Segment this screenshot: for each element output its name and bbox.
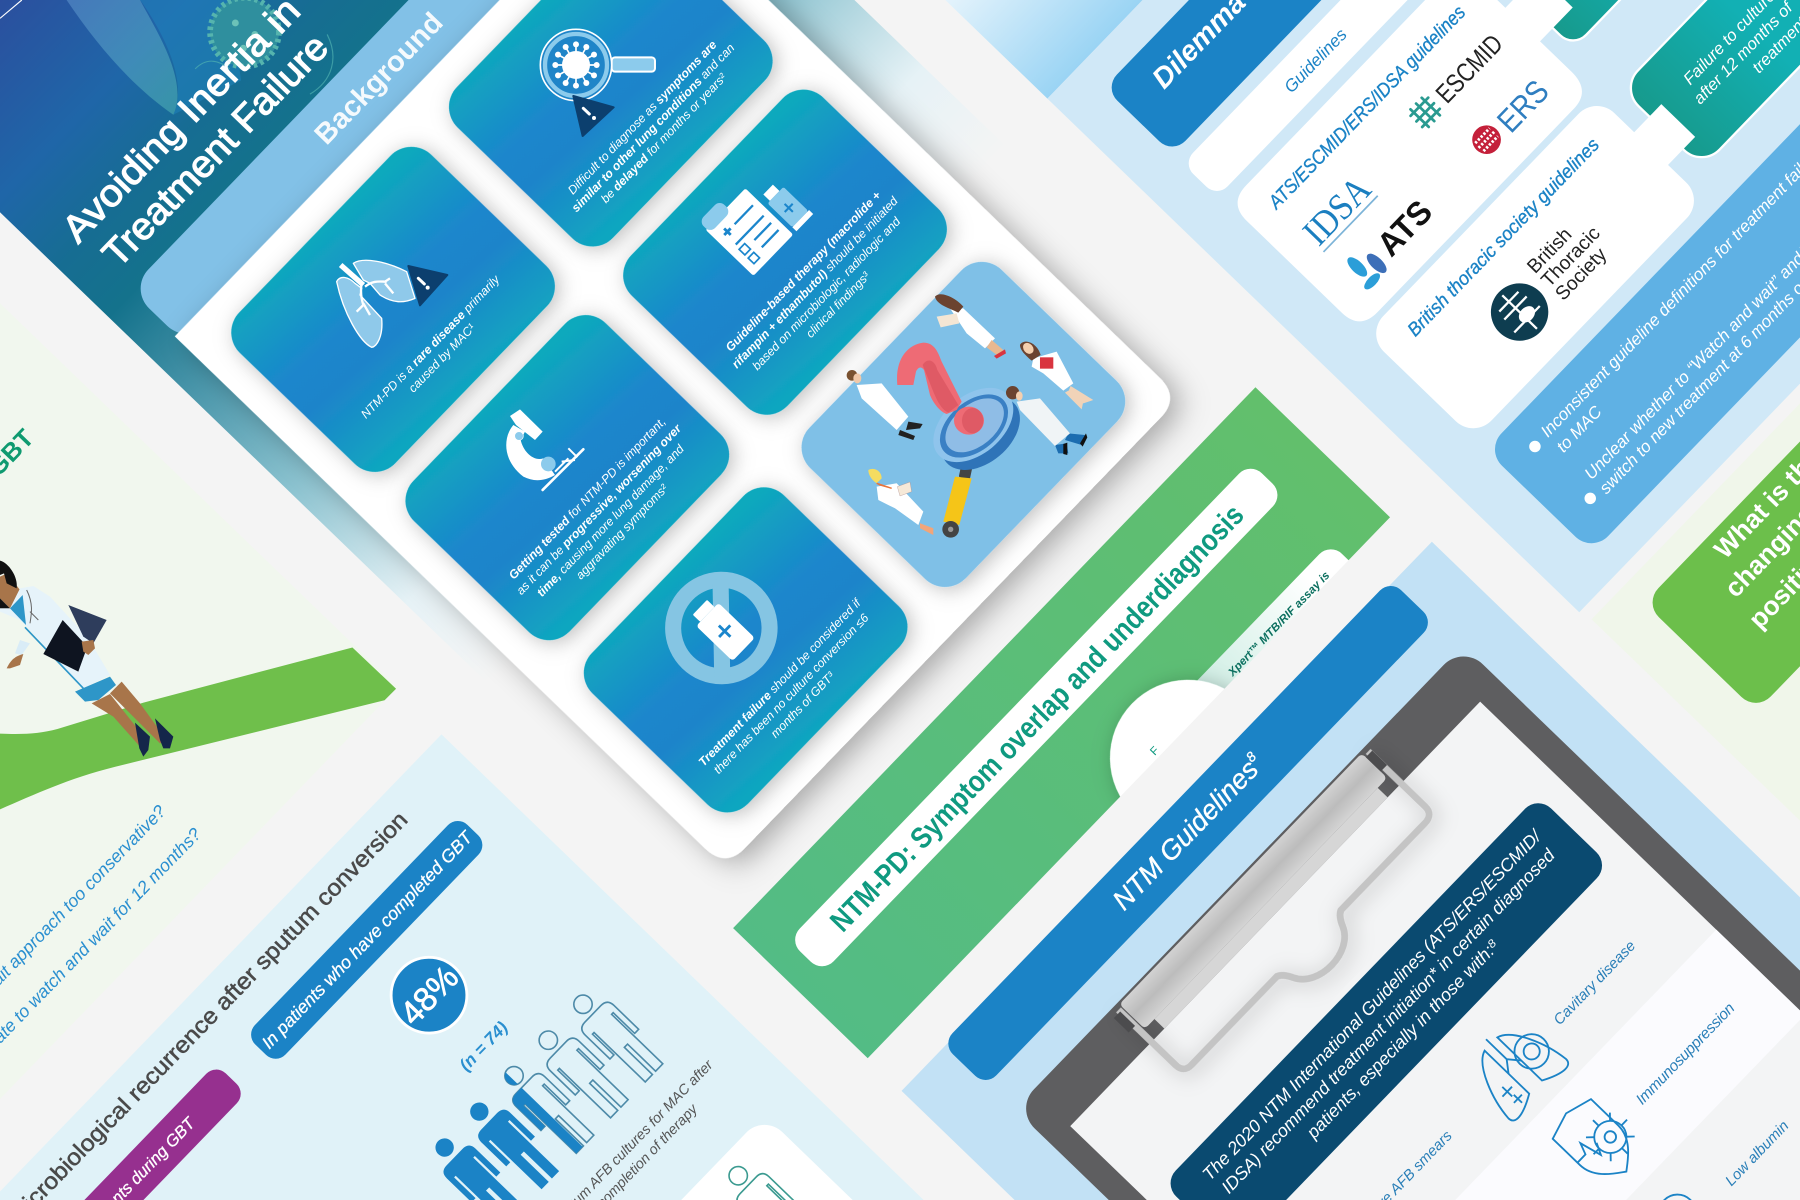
card: guideline-based therapy: clinical findings³	[803, 268, 873, 341]
illustration: doctors and question mark	[847, 294, 1093, 538]
card: getting tested: aggravating symptoms²	[573, 481, 671, 582]
icon: lung cavity	[1457, 1010, 1571, 1123]
logo: British Thoracic Society: Society	[1551, 244, 1611, 305]
guidelines bar	[1183, 0, 1616, 197]
legs	[92, 682, 167, 747]
card: rare disease	[219, 135, 567, 484]
card: treatment failure: months of GBT³	[768, 669, 838, 741]
sky gradient	[869, 0, 1606, 99]
panel: background poster	[0, 0, 1230, 899]
logo: ATS: ATS	[1370, 194, 1440, 264]
heading bar	[942, 580, 1434, 1086]
card: rare disease: caused by MAC¹	[406, 321, 478, 395]
heading bar: 8	[1243, 749, 1259, 765]
pill: patients during GBT	[21, 1064, 246, 1200]
teal callout: failure to culture convert: after 12 months of	[1690, 0, 1798, 108]
doctor left	[847, 370, 923, 440]
illustration: doctor with folder	[0, 561, 173, 757]
logo: ESCMID	[1407, 29, 1509, 133]
icon: clipboard and bottle	[698, 161, 813, 276]
card: difficult to diagnose: similar to other lung conditions and can	[569, 41, 737, 215]
logo: IDSA: IDSA	[1295, 168, 1380, 254]
stat: 48%	[375, 942, 483, 1049]
white box: ATS guidelines	[1229, 0, 1624, 330]
white stat box	[474, 1114, 929, 1200]
white circle	[1078, 647, 1298, 868]
title bar: NTM-PD: Symptom overlap and underdiagnosis	[824, 498, 1251, 938]
card: guideline-based therapy	[611, 78, 959, 427]
panel: watch and wait poster	[0, 277, 398, 1191]
row: immunosuppression: Immunosuppression	[1633, 1000, 1738, 1108]
clipboard board	[1015, 645, 1800, 1200]
dark recommendation box	[1163, 796, 1610, 1200]
pictogram: people	[435, 994, 664, 1200]
icon: shield and virus	[1547, 1086, 1653, 1191]
title: Treatment Failure	[95, 27, 337, 275]
card: treatment failure: Treatment failure should be considered if	[696, 595, 865, 769]
skirt	[75, 677, 116, 702]
Xpert note	[1143, 543, 1380, 785]
Xpert note: Xpert™ MTB/RIF assay is	[1226, 570, 1332, 680]
blue box: dilemma points: to MAC	[1553, 402, 1606, 456]
face and hair	[0, 561, 20, 608]
logo: ATS	[1341, 192, 1440, 293]
card: getting tested	[394, 303, 741, 652]
coat	[0, 586, 110, 688]
title: Avoiding Inertia in	[54, 0, 309, 251]
blue box: dilemma points	[1485, 0, 1800, 553]
gap between panels	[866, 507, 1434, 1093]
row: low albumin	[1651, 1099, 1792, 1200]
question box	[1644, 273, 1800, 711]
card: illustration background	[790, 250, 1137, 599]
logo: ERS: ERS	[1490, 73, 1556, 139]
green road	[0, 647, 396, 809]
logo: British Thoracic Society: British	[1523, 224, 1576, 278]
magnifying glass	[919, 373, 1034, 538]
icon: magnifier with virus	[540, 29, 655, 136]
card: treatment failure	[572, 475, 919, 824]
icon: microscope	[506, 409, 583, 490]
panel: microbiological recurrence	[0, 734, 1020, 1200]
card: treatment failure: there has been no culture conversion ≤6	[711, 611, 872, 777]
doctor top	[935, 294, 1006, 359]
clipboard paper	[1070, 702, 1800, 1200]
white content panel	[175, 0, 1180, 868]
card: getting tested: Getting tested for NTM-PD is important,	[506, 415, 668, 582]
heading band: Background	[129, 0, 640, 345]
panel: symptom overlap	[733, 387, 1462, 1128]
header microbe artwork	[0, 0, 333, 115]
row: immunosuppression	[1547, 975, 1760, 1191]
dark recommendation box: IDSA) recommend treatment initiation* in certain diagnosed	[1218, 844, 1559, 1197]
doctor bottom	[868, 469, 933, 535]
dark recommendation box: The 2020 NTM International Guidelines (ATS/ERS/ESCMID/	[1198, 825, 1546, 1184]
heading bar: NTM Guidelines	[1106, 752, 1266, 916]
metal clip	[1110, 747, 1458, 1101]
guidelines bar: Guidelines	[1280, 24, 1351, 97]
teal callout: failure to culture convert	[1620, 0, 1800, 168]
heading band: Background: Background	[309, 7, 450, 151]
row: low albumin: Low albumin	[1722, 1118, 1792, 1190]
panel: dilemma poster	[869, 0, 1800, 612]
card: guideline-based therapy: rifampin + ethambutol) should be initiated	[729, 193, 902, 371]
logo: ESCMID: ESCMID	[1430, 29, 1509, 109]
white box: British Thoracic Society guidelines	[1366, 67, 1731, 439]
teal callout: upper	[1503, 0, 1800, 48]
panel: question poster	[1592, 124, 1800, 1018]
card: getting tested: time, causing more lung damage, and	[534, 441, 688, 599]
panel: NTM guidelines	[899, 539, 1800, 1200]
white box: British Thoracic Society guidelines: British thoracic society guidelines	[1404, 134, 1604, 341]
card: rare disease: NTM-PD is a rare disease primarily	[358, 272, 503, 421]
white circle: F	[1148, 745, 1162, 758]
card: getting tested: as it can be progressive, worsening over	[513, 421, 685, 598]
icon: prohibited bottle	[653, 560, 790, 696]
card: difficult to diagnose: be delayed for months or years²	[598, 70, 730, 206]
sample size: (n = 74)	[455, 1017, 512, 1075]
card: guideline-based therapy: based on microbiologic, radiologic and	[750, 214, 904, 373]
card: guideline-based therapy: Guideline-based therapy (macrolide +	[723, 188, 884, 354]
stat: 48%: 48%	[393, 959, 466, 1033]
icon: lungs with warning	[337, 260, 447, 347]
doctor right	[1020, 341, 1093, 409]
row: cavitary disease: Cavitary disease	[1550, 937, 1639, 1029]
logo: ERS	[1466, 73, 1556, 164]
question mark	[897, 343, 984, 435]
logo: British Thoracic Society: Thoracic	[1537, 222, 1605, 291]
heading: Dilemma	[1104, 0, 1571, 154]
row: cavitary disease	[1457, 916, 1661, 1123]
logo: British Thoracic Society	[1477, 209, 1619, 353]
card: difficult to diagnose: Difficult to diagnose as symptoms are	[565, 38, 720, 197]
shoes	[135, 718, 173, 757]
folder	[43, 605, 107, 672]
card: difficult to diagnose	[437, 0, 785, 258]
doctor center	[1006, 386, 1087, 455]
dark recommendation box: patients, especially in those with:⁸	[1302, 935, 1504, 1143]
pill: completed GBT: In patients who have completed GBT	[258, 827, 477, 1053]
